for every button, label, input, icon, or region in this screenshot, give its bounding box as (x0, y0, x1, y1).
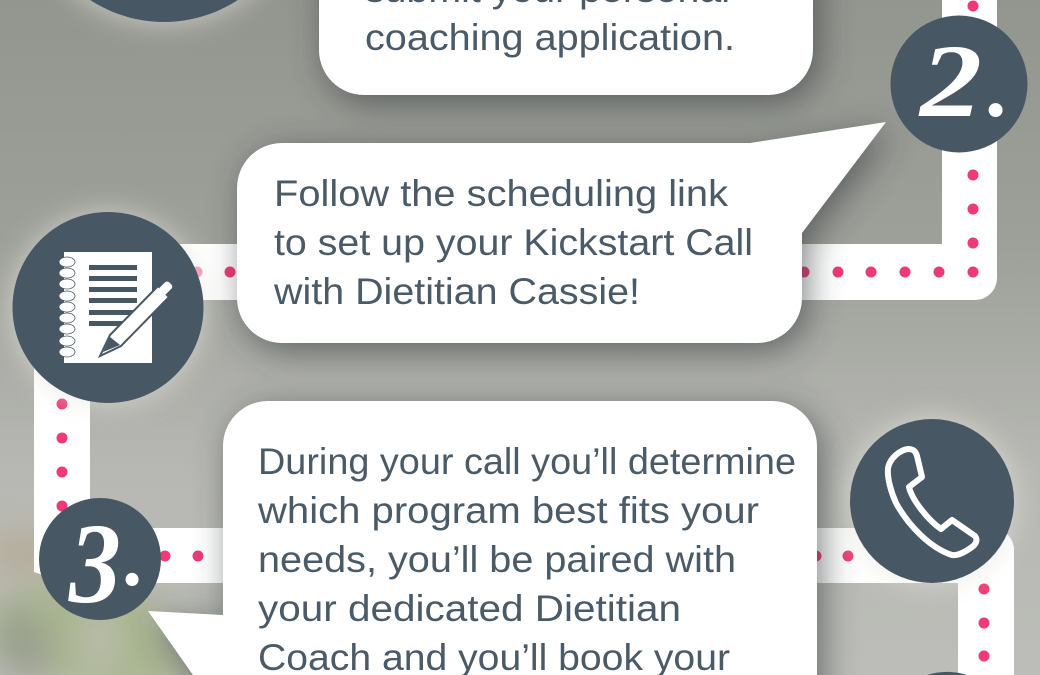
step number 3 badge (39, 498, 161, 627)
step 3 speech bubble: which program best fits your (257, 490, 759, 531)
step 1 speech bubble: coaching application. (365, 17, 735, 58)
icon: telephone handset (850, 419, 1014, 583)
step 2 speech bubble (237, 122, 886, 343)
step 3 speech bubble: During your call you’ll determine (258, 441, 796, 482)
icon: notebook and pencil (12, 212, 204, 403)
step number 2 badge: . (988, 39, 1010, 135)
step number 3 badge: 3 (68, 500, 121, 627)
step 2 speech bubble: to set up your Kickstart Call (274, 222, 753, 263)
step 1 speech bubble (319, 0, 813, 95)
step number 2 badge: 2 (918, 24, 982, 139)
step 3 speech bubble: your dedicated Dietitian (258, 588, 681, 629)
step 3 speech bubble: needs, you’ll be paired with (258, 539, 736, 580)
top-left circle (90, 0, 238, 22)
bubble shadows (154, 0, 892, 675)
step 2 speech bubble: with Dietitian Cassie! (273, 271, 640, 312)
step 2 speech bubble: Follow the scheduling link (274, 173, 729, 214)
step 3 speech bubble (148, 401, 817, 675)
step number 3 badge: . (125, 515, 145, 603)
next step badge, partly cropped (927, 672, 967, 675)
step number 2 badge (890, 16, 1028, 152)
